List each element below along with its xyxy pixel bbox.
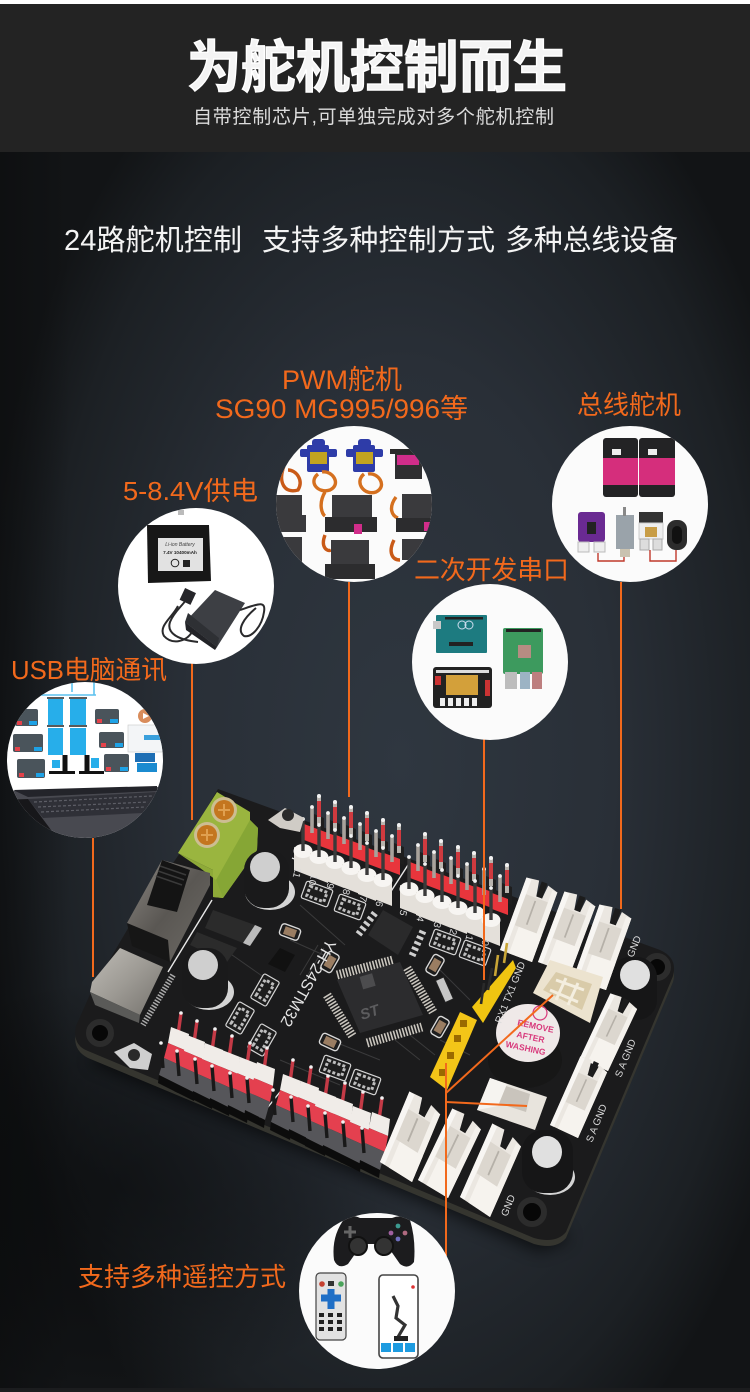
terminal block	[178, 792, 258, 898]
circle: bus servos	[550, 424, 710, 584]
label: PWM servo: PWM舵机	[282, 365, 402, 395]
cream connector	[533, 960, 603, 1023]
slide switch	[127, 860, 210, 962]
edge labels: S A GND	[585, 1103, 610, 1144]
connector line: power	[191, 663, 193, 820]
yellow socket	[430, 1012, 477, 1090]
gamepad	[333, 1216, 414, 1267]
pin header numbers: 3	[430, 921, 442, 929]
connector middle	[477, 1078, 547, 1130]
pin header numbers: 1	[462, 934, 474, 942]
buzzer	[488, 1004, 562, 1088]
motor	[616, 507, 634, 557]
title: 为舵机控制而生	[187, 36, 567, 99]
buzzer: REMOVE	[517, 1017, 555, 1035]
pink servo	[390, 449, 422, 479]
pin header numbers: 9	[323, 882, 335, 890]
capacitors	[182, 850, 657, 1195]
edge labels	[494, 934, 644, 1218]
connector line: bus servo	[620, 582, 622, 909]
bus servo pair	[603, 438, 675, 497]
connector lines: remote	[446, 995, 553, 1256]
app screen	[35, 682, 104, 774]
blue SG90 servos	[300, 439, 383, 472]
feature line	[64, 224, 678, 257]
connectors bottom	[380, 1090, 523, 1217]
feature line: 多种总线设备	[505, 224, 678, 257]
SMD parts	[190, 881, 491, 1095]
power adapter	[163, 588, 264, 650]
control cards	[13, 709, 129, 778]
circle: power supply	[116, 506, 276, 666]
pin header numbers: 11	[290, 866, 303, 880]
pin header numbers: 8	[339, 888, 351, 896]
connectors upper right	[500, 876, 633, 990]
speaker	[667, 520, 687, 550]
MCU chip	[327, 960, 433, 1043]
pin header numbers: 0	[478, 939, 490, 947]
IR remote	[316, 1273, 346, 1340]
edge labels: GND	[626, 934, 644, 959]
battery: Li-ion Battery	[165, 542, 195, 548]
yellow pin header	[472, 943, 516, 1023]
label: PWM servo	[215, 365, 468, 424]
pin header numbers	[290, 866, 490, 947]
MCU chip: ST	[358, 1001, 383, 1024]
tact switch bottom	[114, 1043, 152, 1070]
label: serial port: 二次开发串口	[414, 555, 569, 585]
servo wires	[282, 466, 400, 560]
laptop body	[13, 786, 158, 838]
pin header numbers: 10	[306, 873, 319, 887]
pin header bottom left	[158, 1011, 275, 1128]
phone app	[379, 1275, 418, 1358]
pin header numbers: 7	[356, 895, 368, 903]
edge labels: RX1 TX1 GND	[494, 960, 528, 1025]
pin header top left	[294, 794, 404, 906]
feature line: 支持多种控制方式	[262, 224, 495, 257]
circle: USB PC software	[7, 682, 163, 838]
small chip	[358, 910, 423, 958]
subtitle: 自带控制芯片,可单独完成对多个舵机控制	[193, 106, 554, 128]
Arduino board	[433, 615, 487, 653]
tact switch top	[268, 808, 304, 832]
pin header numbers: 5	[396, 909, 408, 917]
edge labels: GND	[500, 1193, 518, 1218]
circle: remote controls	[297, 1211, 457, 1371]
right hand options	[128, 709, 163, 772]
wires	[598, 550, 676, 561]
connector line: serial	[483, 739, 485, 980]
label: PWM servo: SG90 MG995/996等	[215, 394, 468, 424]
header band	[0, 0, 750, 152]
board edge	[75, 795, 674, 1246]
pin header numbers: 2	[446, 928, 458, 936]
buzzer: AFTER	[516, 1029, 546, 1045]
buzzer: WASHING	[505, 1039, 547, 1057]
silk lines	[168, 858, 408, 1122]
pin header top right	[400, 832, 512, 946]
sound module	[639, 512, 663, 550]
mounting holes	[89, 956, 668, 1224]
connector line: USB	[92, 838, 94, 977]
battery	[147, 510, 211, 583]
control board	[75, 789, 674, 1252]
black servos	[275, 494, 432, 579]
board surface	[75, 789, 674, 1240]
connectors right side	[550, 992, 639, 1138]
circle: PWM servos	[274, 424, 434, 584]
edge labels: S A GND	[614, 1038, 639, 1079]
label: USB: USB电脑通讯	[11, 655, 167, 685]
pin header numbers: 4	[413, 915, 425, 923]
label: bus servo: 总线舵机	[577, 390, 681, 420]
pin header numbers: 6	[372, 900, 384, 908]
battery: 7.4V 10400mAh	[163, 550, 197, 555]
expansion board	[433, 667, 492, 708]
USB-C port	[90, 948, 173, 1025]
circle: dev boards	[410, 582, 570, 742]
connector line: PWM	[348, 582, 350, 797]
label: remote control: 支持多种遥控方式	[78, 1262, 286, 1292]
pin header bottom right	[270, 1058, 390, 1178]
board model text: YH-24STM32	[276, 936, 338, 1029]
feature line: 24路舵机控制	[64, 224, 242, 257]
label: power supply: 5-8.4V供电	[123, 476, 258, 506]
Raspberry Pi	[503, 628, 543, 689]
purple driver board	[578, 512, 605, 552]
